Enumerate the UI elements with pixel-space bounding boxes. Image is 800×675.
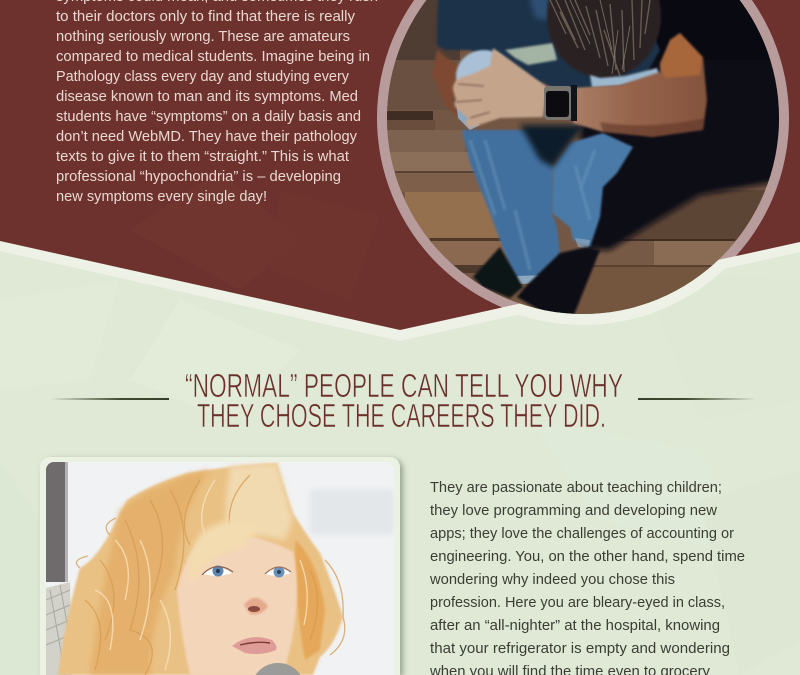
light halo around photo xyxy=(500,256,738,325)
collar of light shirt xyxy=(590,68,660,88)
mint section background xyxy=(0,251,800,675)
body text: careers paragraph: they love programming and developing new xyxy=(430,502,717,519)
photo card frame xyxy=(40,457,400,675)
microphone xyxy=(256,663,300,675)
smartwatch xyxy=(544,85,577,121)
body text: hypochondria paragraph: students have “symptoms” on a daily basis and xyxy=(56,109,361,125)
body text: hypochondria paragraph: to their doctors only to find that there is really xyxy=(56,9,356,25)
body text: hypochondria paragraph: nothing seriously wrong. These are amateurs xyxy=(56,29,350,45)
navy t-shirt xyxy=(437,0,660,90)
circular photo: man sitting on floor xyxy=(380,0,800,320)
body text: careers paragraph: profession. Here you are bleary-eyed in class, xyxy=(430,594,725,611)
body text: hypochondria paragraph: texts to give it to them “straight.” This is what xyxy=(56,149,349,165)
body text: careers paragraph: after an “all-nighter” at the hospital, knowing xyxy=(430,617,720,634)
left upper arm xyxy=(432,50,458,116)
bright room background xyxy=(46,462,394,675)
face xyxy=(177,521,297,675)
body text: hypochondria paragraph xyxy=(56,0,378,205)
heading xyxy=(185,368,623,435)
body text: hypochondria paragraph: disease known to man and its symptoms. Med xyxy=(56,89,358,105)
body text: hypochondria paragraph: Pathology class every day and studying every xyxy=(56,69,350,85)
heading rule right xyxy=(638,398,756,400)
wood floor xyxy=(380,0,800,320)
wavy divider: light band xyxy=(0,241,800,360)
body text: careers paragraph: engineering. You, on the other hand, spend time xyxy=(430,548,745,565)
body text: careers paragraph: that your refrigerator is empty and wondering xyxy=(430,640,730,657)
blue jeans: legs xyxy=(462,125,633,284)
nose xyxy=(244,598,268,614)
upper arm and forearm xyxy=(573,33,707,137)
body text: careers paragraph: apps; they love the challenges of accounting or xyxy=(430,525,734,542)
heading rule left xyxy=(50,398,169,400)
hand on knee xyxy=(453,48,547,128)
body text: careers paragraph: wondering why indeed you chose this xyxy=(429,571,675,588)
maroon section background xyxy=(0,0,800,345)
knee xyxy=(454,48,504,82)
body text: hypochondria paragraph: new symptoms every single day! xyxy=(56,189,267,205)
photo: woman speaking into microphone xyxy=(46,462,394,675)
body text: hypochondria paragraph: don’t need WebMD. They have their pathology xyxy=(56,129,358,145)
body text: hypochondria paragraph: compared to medical students. Imagine being in xyxy=(56,49,370,65)
body text: careers paragraph: They are passionate about teaching children; xyxy=(430,479,722,496)
black shoes xyxy=(473,247,600,320)
eyes xyxy=(202,566,291,578)
grey beard xyxy=(547,0,661,78)
lips xyxy=(232,637,276,654)
blonde hair xyxy=(58,463,345,675)
body text: careers paragraph xyxy=(429,479,745,675)
portrait ring xyxy=(377,0,789,324)
dark background and shadow xyxy=(580,0,800,250)
body text: hypochondria paragraph: professional “hypochondria” is – developing xyxy=(56,169,341,185)
